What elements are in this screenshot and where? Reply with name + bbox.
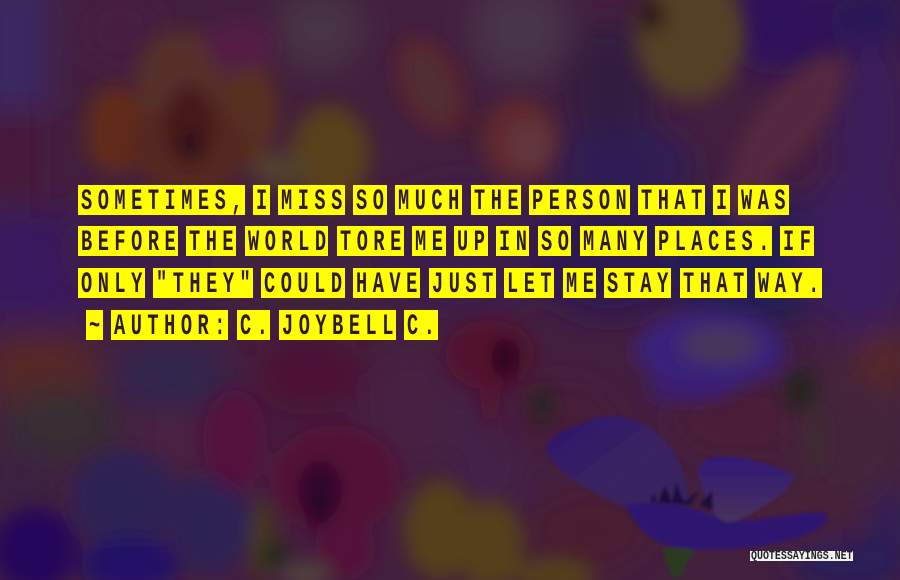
red tulip — [203, 390, 267, 490]
blue flowers bottom left — [70, 450, 180, 550]
icon: purple flower — [546, 416, 827, 578]
quote line 1 — [78, 185, 789, 215]
yellow flower — [290, 105, 370, 205]
red flower — [382, 27, 478, 143]
quote line 2 — [78, 226, 814, 256]
purple flower right — [635, 310, 785, 390]
orange flower — [85, 85, 145, 175]
quote line 3 — [78, 268, 822, 298]
pink flower right — [716, 39, 864, 201]
red flower top centre — [445, 320, 535, 390]
yellow petals bottom — [250, 500, 274, 580]
author line — [86, 310, 438, 340]
yellow top flower — [635, 0, 745, 100]
